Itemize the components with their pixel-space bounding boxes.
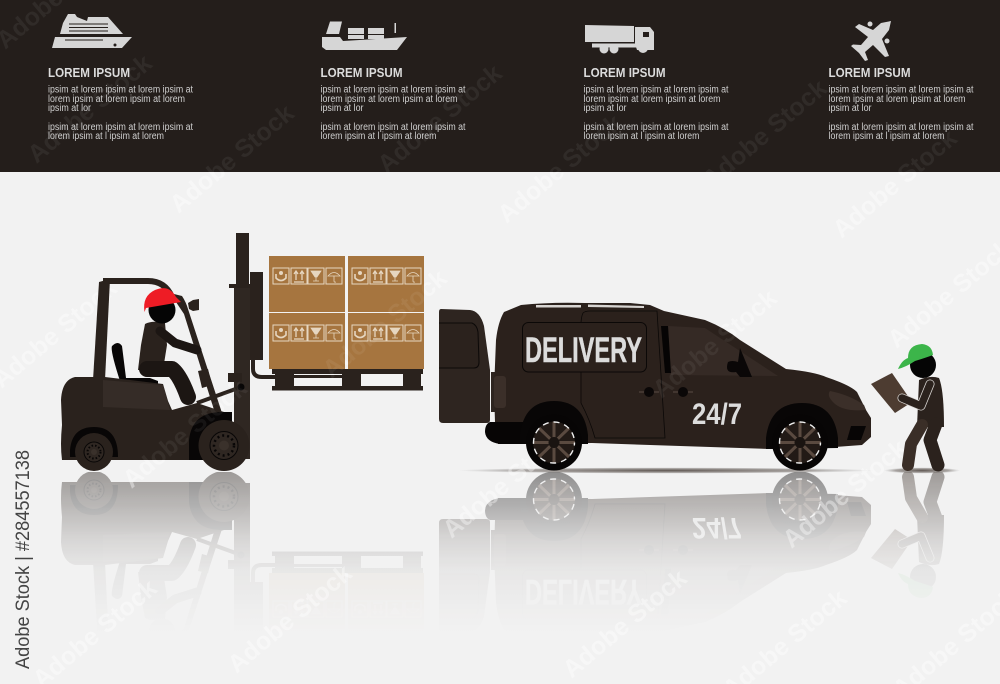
text block 3: ipsim at lorem ipsim at lorem ipsim at <box>584 84 729 96</box>
text block 1 <box>48 66 193 142</box>
text block 4: ipsim at lorem ipsim at lorem ipsim at <box>828 122 974 133</box>
text block 2: LOREM IPSUM <box>320 66 402 80</box>
faint watermarks over dark artwork <box>0 0 962 494</box>
text block 3: lorem ipsim at l ipsim at lorem <box>584 131 700 142</box>
text block 2: lorem ipsim at l ipsim at lorem <box>320 131 436 142</box>
text block 2: ipsim at lorem ipsim at lorem ipsim at <box>320 122 466 133</box>
watermarks on light background: Adobe Stock <box>827 124 962 244</box>
column 3: truck <box>584 25 729 142</box>
main scene: forklift, boxes, van and courier <box>61 233 944 471</box>
text block 4 <box>828 66 974 142</box>
faint watermarks over dark artwork: Adobe Stock <box>317 264 452 384</box>
watermarks on light background: Adobe Stock <box>777 434 912 554</box>
faint watermarks over dark artwork: Adobe Stock <box>117 374 252 494</box>
icon: truck <box>585 25 654 54</box>
text block 3 <box>584 66 729 142</box>
icon: cargo ship <box>322 22 407 50</box>
text block 1: ipsim at lorem ipsim at lorem ipsim at <box>48 84 193 96</box>
text block 3: ipsim at lorem ipsim at lorem ipsim at <box>584 122 729 133</box>
text block 1: lorem ipsim at l ipsim at lorem <box>48 131 164 142</box>
ground shadows <box>458 468 960 474</box>
faint watermarks over dark artwork: Adobe Stock <box>647 284 782 404</box>
text block 1: ipsim at lorem ipsim at lorem ipsim at <box>48 122 193 133</box>
watermarks on light background: Adobe Stock <box>317 264 452 384</box>
faint watermarks over dark artwork: Adobe Stock <box>372 59 507 179</box>
watermarks on light background <box>61 294 944 586</box>
text block 4: lorem ipsim at lorem ipsim at lorem <box>828 94 966 105</box>
faint watermarks over dark artwork: Adobe Stock <box>22 49 157 169</box>
stock id text: Adobe Stock | #284557138 <box>13 450 34 669</box>
faint watermarks over dark artwork: Adobe Stock <box>697 74 832 194</box>
floor reflection <box>61 472 944 590</box>
icon: airplane <box>851 21 891 61</box>
text block 4: lorem ipsim at l ipsim at lorem <box>828 131 944 142</box>
watermarks on light background: Adobe Stock <box>647 284 782 404</box>
column 2: cargo ship <box>320 22 466 142</box>
text block 1: ipsim at lor <box>48 103 92 114</box>
watermarks on light background: Adobe Stock <box>557 564 692 684</box>
text block 3: ipsim at lor <box>584 103 627 114</box>
text block 4: ipsim at lor <box>828 103 872 114</box>
text block 4: ipsim at lorem ipsim at lorem ipsim at <box>828 84 974 96</box>
watermarks on light background: Adobe Stock <box>437 424 572 544</box>
text block 3: lorem ipsim at lorem ipsim at lorem <box>584 94 720 105</box>
faint watermarks over dark artwork: Adobe Stock <box>164 99 299 219</box>
faint watermarks over dark artwork: Adobe Stock <box>492 109 627 229</box>
column 1: cruise liner <box>48 14 193 142</box>
text block 2: lorem ipsim at lorem ipsim at lorem <box>320 94 458 105</box>
text block 2: ipsim at lor <box>320 103 364 114</box>
text block 1: LOREM IPSUM <box>48 66 130 80</box>
text block 4: LOREM IPSUM <box>828 66 910 80</box>
header band <box>0 0 1000 172</box>
faint watermarks over dark artwork: Adobe Stock <box>827 124 962 244</box>
text block 3: LOREM IPSUM <box>584 66 666 80</box>
text block 2 <box>320 66 466 142</box>
text block 1: lorem ipsim at lorem ipsim at lorem <box>48 94 185 105</box>
column 4: airplane <box>828 21 974 142</box>
text block 2: ipsim at lorem ipsim at lorem ipsim at <box>320 84 466 96</box>
watermarks on light background: Adobe Stock <box>222 559 357 679</box>
icon: cruise ship <box>52 14 132 48</box>
watermarks on light background: Adobe Stock <box>117 374 252 494</box>
watermarks on light background: Adobe Stock <box>164 99 299 219</box>
watermarks on light background: Adobe Stock <box>492 109 627 229</box>
